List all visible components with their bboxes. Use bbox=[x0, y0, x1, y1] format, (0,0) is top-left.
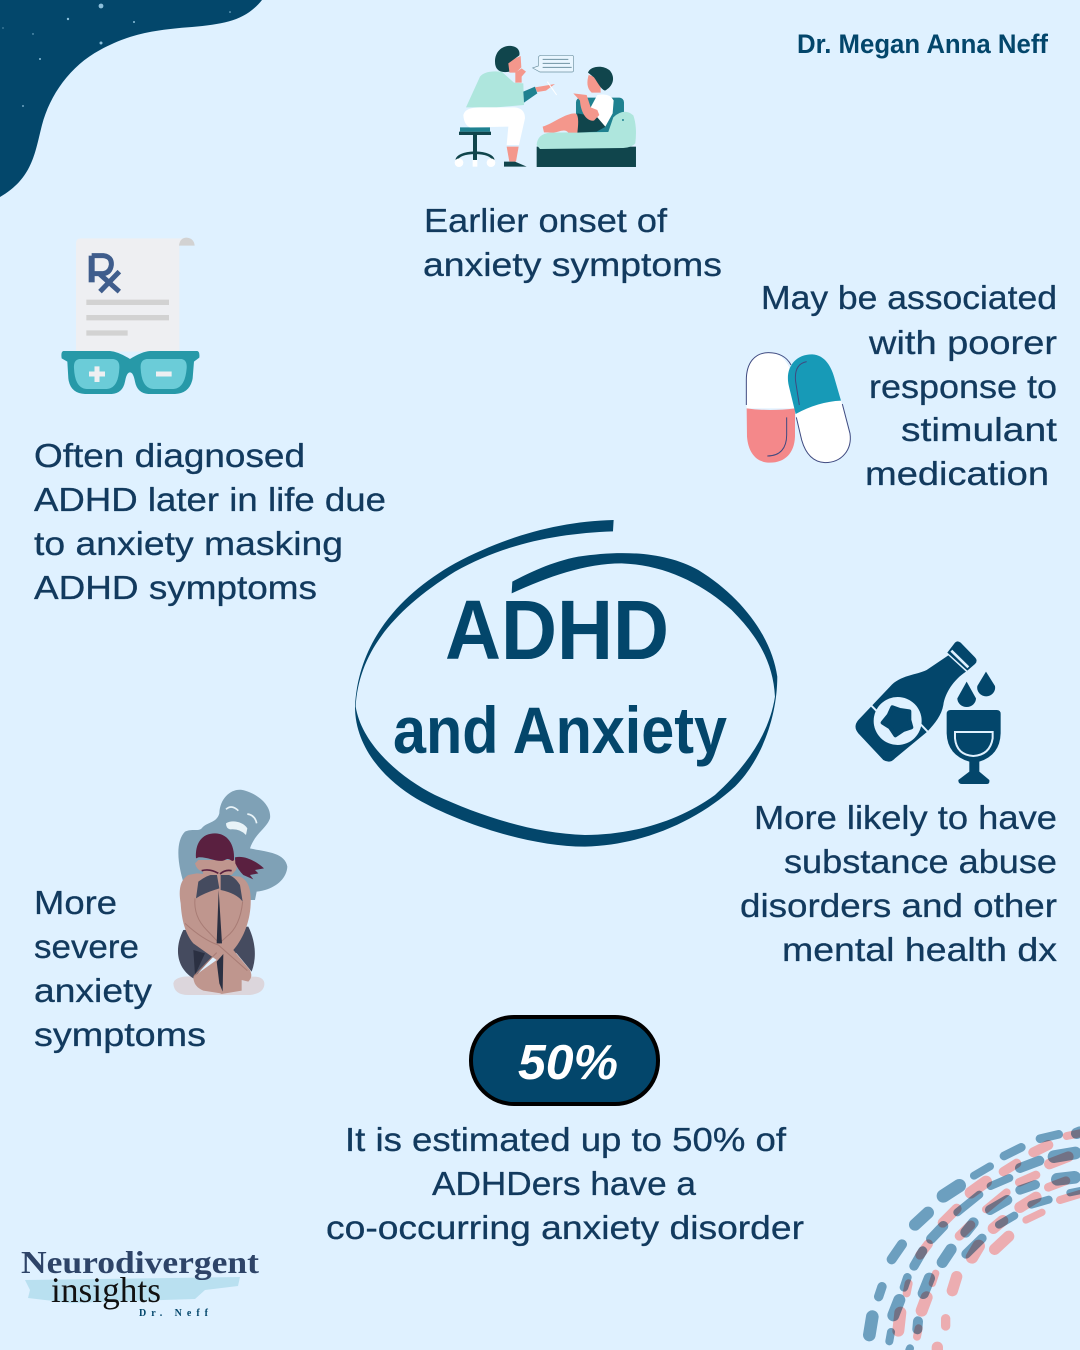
text: diagnosed later: Often diagnosed bbox=[34, 437, 305, 474]
text: stimulant response: stimulant bbox=[901, 411, 1057, 448]
icon: therapist and child bbox=[455, 46, 636, 167]
text: substance abuse bbox=[740, 799, 1058, 968]
text: estimate statement bbox=[326, 1121, 804, 1246]
icon: bottle and glass bbox=[855, 641, 1001, 784]
text: stimulant response bbox=[761, 279, 1057, 492]
logo: Neurodivergent Insights bbox=[21, 1244, 259, 1319]
text: severe symptoms: severe bbox=[34, 928, 139, 965]
text: estimate statement: It is estimated up to 50% of bbox=[345, 1121, 787, 1158]
decorative dashed arcs bbox=[869, 1132, 1080, 1350]
icon: anxious seated figure bbox=[173, 790, 287, 995]
corner blob with stars bbox=[0, 0, 262, 197]
heading: earlier onset bbox=[423, 202, 722, 283]
text: diagnosed later: to anxiety masking bbox=[34, 525, 343, 562]
logo: Neurodivergent Insights: Neurodivergent bbox=[21, 1244, 259, 1280]
statistic badge: 50% bbox=[471, 1017, 658, 1104]
icon: prescription and glasses bbox=[61, 238, 199, 394]
text: diagnosed later: ADHD symptoms bbox=[34, 569, 317, 606]
text: severe symptoms: anxiety bbox=[34, 972, 153, 1009]
text: substance abuse: substance abuse bbox=[784, 843, 1057, 880]
text: stimulant response: May be associated bbox=[761, 279, 1057, 316]
text: stimulant response: response to bbox=[869, 368, 1057, 405]
text: severe symptoms: More bbox=[34, 884, 117, 921]
heading: earlier onset: anxiety symptoms bbox=[423, 246, 722, 283]
title circle bbox=[355, 520, 777, 847]
icon: capsules bbox=[746, 353, 850, 463]
text: substance abuse: More likely to have bbox=[754, 799, 1057, 836]
statistic badge: 50%: 50% bbox=[518, 1036, 618, 1090]
logo: Neurodivergent Insights: insights bbox=[51, 1270, 161, 1310]
heading: earlier onset: Earlier onset of bbox=[424, 202, 668, 239]
logo: Neurodivergent Insights: Dr. Neff bbox=[139, 1308, 209, 1319]
title: ADHD and Anxiety: ADHD bbox=[445, 583, 669, 677]
text: severe symptoms: symptoms bbox=[34, 1016, 206, 1053]
text: diagnosed later bbox=[34, 437, 386, 606]
title: ADHD and Anxiety: and Anxiety bbox=[393, 693, 727, 767]
text: substance abuse: disorders and other bbox=[740, 887, 1057, 924]
text: stimulant response: with poorer bbox=[868, 324, 1057, 361]
text: substance abuse: mental health dx bbox=[782, 931, 1058, 968]
text: severe symptoms bbox=[34, 884, 206, 1053]
text: estimate statement: co-occurring anxiety disorder bbox=[326, 1209, 804, 1246]
text: diagnosed later: ADHD later in life due bbox=[34, 481, 386, 518]
text: stimulant response: medication bbox=[865, 455, 1049, 492]
text: estimate statement: ADHDers have a bbox=[432, 1165, 697, 1202]
title: ADHD and Anxiety bbox=[393, 583, 727, 767]
author name: Dr. Megan Anna Neff bbox=[797, 29, 1049, 59]
